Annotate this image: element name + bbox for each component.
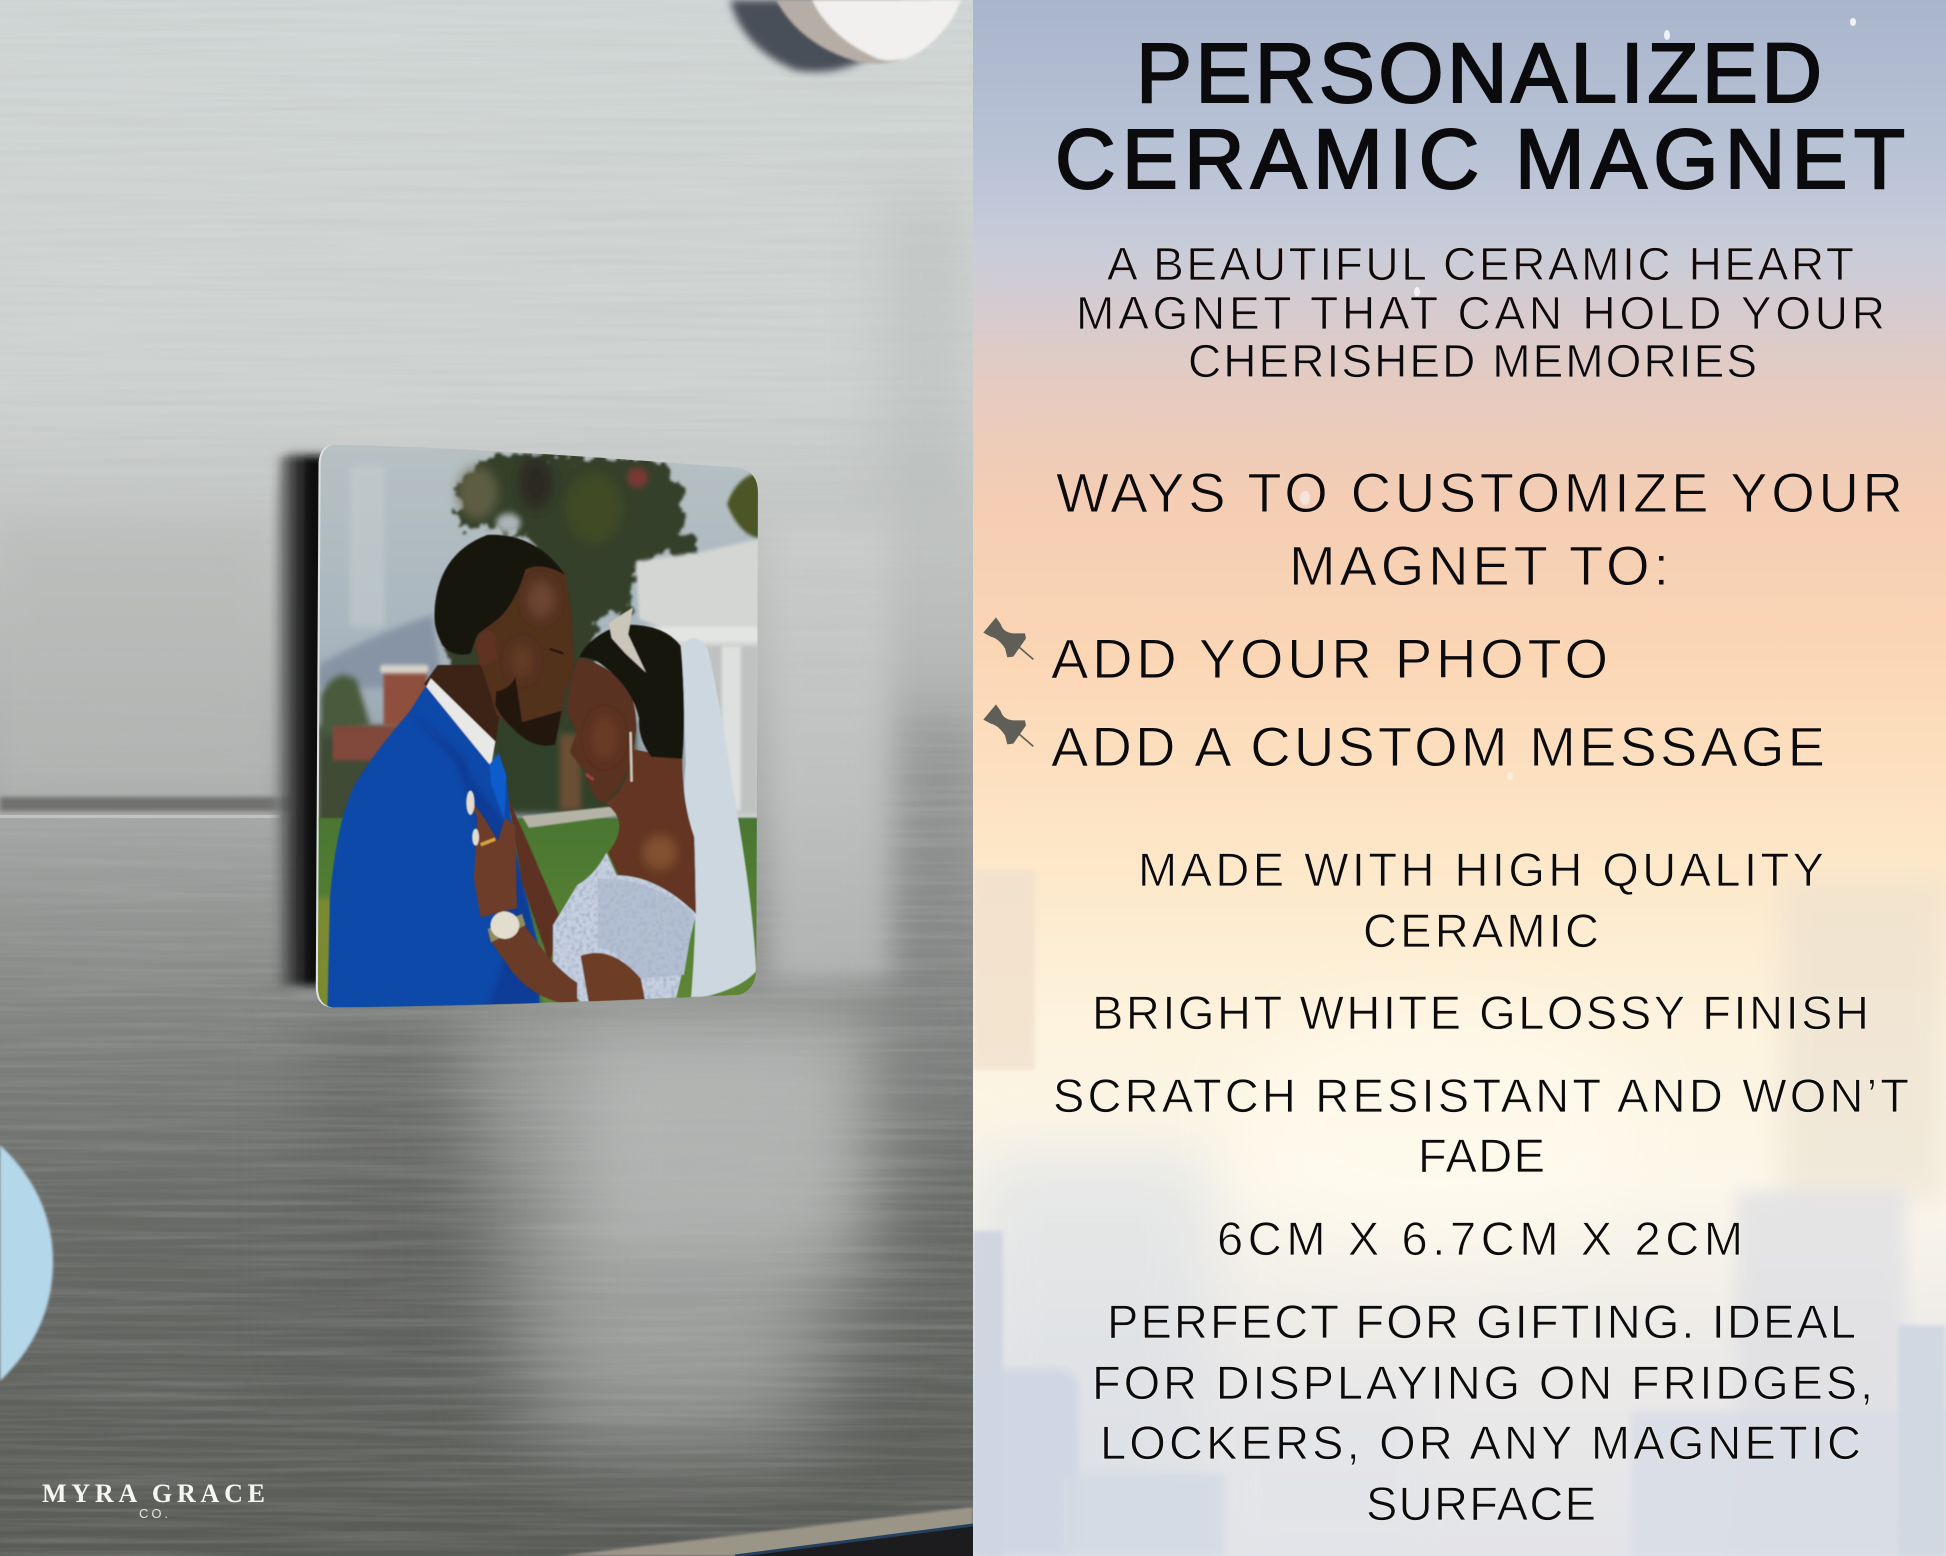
heading: ways to customize bbox=[1056, 474, 1900, 585]
heading: ways to customize: WAYS TO CUSTOMIZE YOUR bbox=[1056, 461, 1903, 524]
logo: Myra Grace Co. bbox=[42, 1484, 264, 1518]
icon: pushpin bbox=[983, 617, 1033, 659]
icon: pale blue round magnet, left bbox=[0, 1145, 53, 1381]
icon: white round magnet, top bbox=[730, 0, 961, 72]
intro text: CHERISHED MEMORIES bbox=[1188, 335, 1757, 387]
feature: finish: BRIGHT WHITE GLOSSY FINISH bbox=[1092, 986, 1869, 1039]
photo background: sky, hills, tree and building bbox=[315, 439, 763, 826]
photo foreground lawn bbox=[315, 805, 763, 1013]
panel: brushed steel fridge photo bbox=[0, 0, 973, 1556]
panel: watercolor sunset product details bbox=[973, 0, 1946, 1556]
icon: pushpin bbox=[983, 704, 1033, 746]
title: PERSONALIZED bbox=[1136, 26, 1822, 120]
title bbox=[1058, 42, 1904, 190]
intro text: MAGNET THAT CAN HOLD YOUR bbox=[1076, 287, 1885, 339]
intro text: A BEAUTIFUL CERAMIC HEART bbox=[1107, 238, 1854, 290]
sky sparkles bbox=[1300, 18, 1856, 780]
faded skyline background bbox=[973, 870, 1946, 1556]
feature: durability: SCRATCH RESISTANT AND WON’T bbox=[1053, 1069, 1909, 1122]
bottom edge of the fridge door bbox=[560, 1507, 973, 1556]
magnet: wedding photo bbox=[315, 439, 763, 1013]
intro text bbox=[1080, 247, 1882, 378]
feature: ceramic quality: CERAMIC bbox=[1363, 904, 1599, 957]
logo: Myra Grace Co.: MYRA GRACE bbox=[42, 1479, 265, 1508]
option: add your photo: ADD YOUR PHOTO bbox=[1051, 627, 1608, 690]
feature: ceramic quality bbox=[1138, 843, 1824, 957]
feature: gifting use bbox=[1092, 1295, 1873, 1530]
feature: gifting use: LOCKERS, OR ANY MAGNETIC bbox=[1100, 1416, 1861, 1469]
feature: ceramic quality: MADE WITH HIGH QUALITY bbox=[1138, 843, 1824, 896]
feature: durability: FADE bbox=[1418, 1129, 1545, 1182]
groom bbox=[327, 535, 574, 1009]
heading: ways to customize: MAGNET TO: bbox=[1289, 534, 1669, 597]
option: add a custom message: ADD A CUSTOM MESSAGE bbox=[1051, 715, 1825, 778]
feature: gifting use: PERFECT FOR GIFTING. IDEAL bbox=[1107, 1295, 1856, 1348]
feature: gifting use: SURFACE bbox=[1366, 1477, 1596, 1530]
feature: gifting use: FOR DISPLAYING ON FRIDGES, bbox=[1092, 1356, 1873, 1409]
magnet drop shadow bbox=[274, 450, 326, 996]
title: CERAMIC MAGNET bbox=[1055, 112, 1905, 206]
feature: dimensions: 6CM X 6.7CM X 2CM bbox=[1217, 1212, 1743, 1265]
feature: durability bbox=[1053, 1069, 1909, 1182]
list: customization options bbox=[983, 617, 1825, 778]
bride bbox=[466, 608, 756, 1006]
logo: Myra Grace Co.: CO. bbox=[139, 1506, 168, 1521]
